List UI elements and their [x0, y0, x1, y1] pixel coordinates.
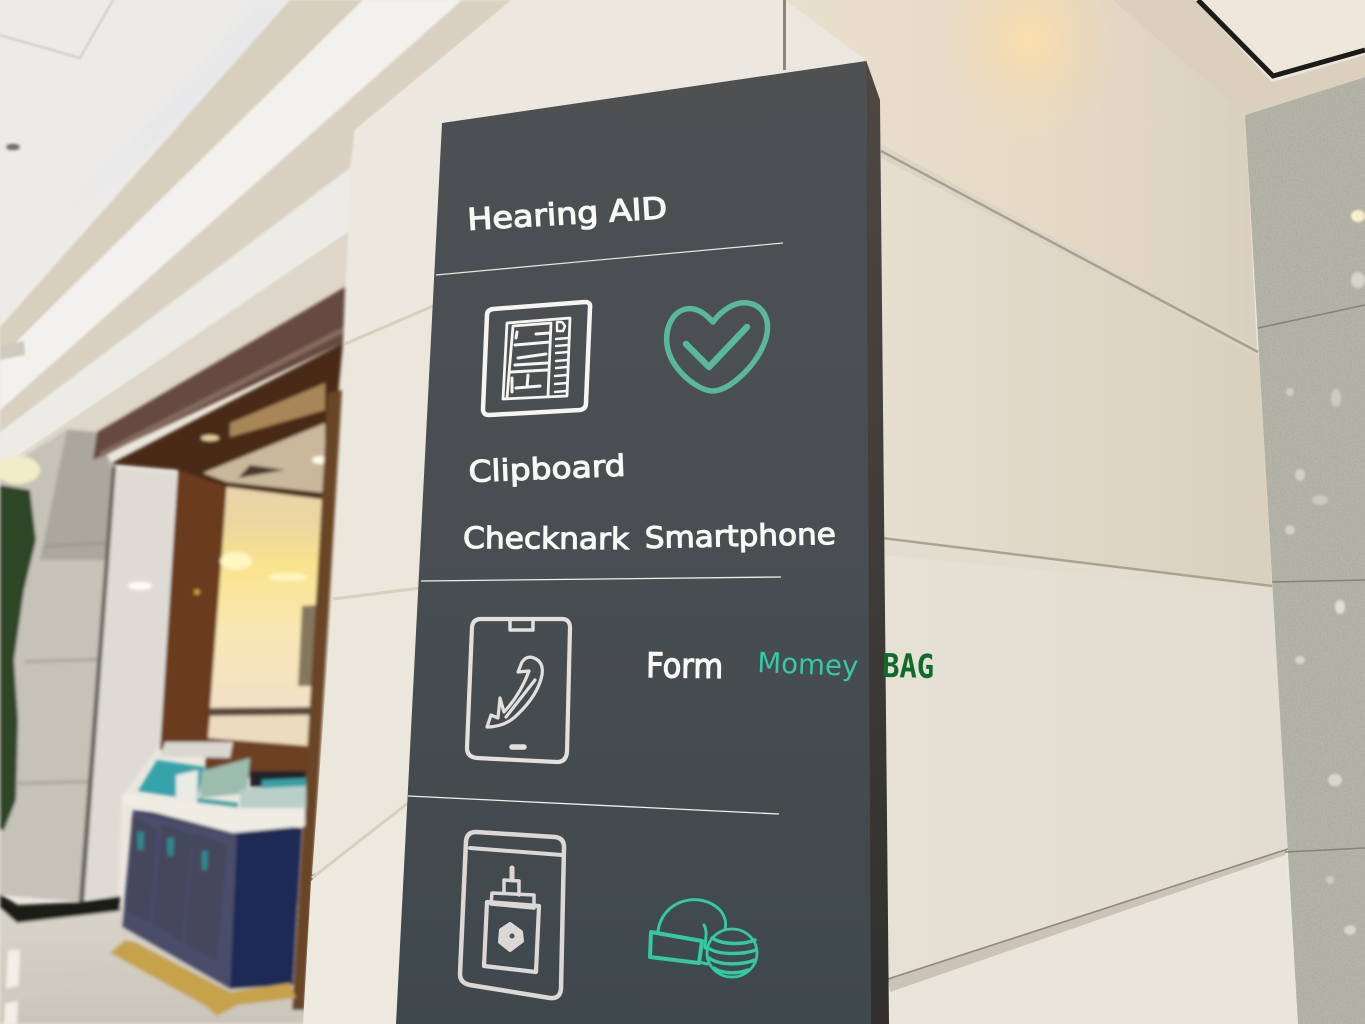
- column behind sign: stacked stone blocks: [303, 0, 785, 1024]
- right door jamb: [292, 390, 342, 1010]
- label: Form: Form: [646, 646, 723, 687]
- counter goods: [138, 760, 205, 800]
- black base: [0, 894, 120, 923]
- floor: [0, 905, 310, 1024]
- icon: money bag with coins: [650, 900, 757, 977]
- interior window: [210, 487, 324, 709]
- icon: clipboard: [483, 302, 590, 415]
- sign face: [396, 61, 871, 1024]
- label: Clipboard: Clipboard: [468, 449, 626, 489]
- sign panel: [396, 61, 871, 1024]
- sign side edge: [866, 60, 889, 1024]
- plant: [0, 485, 36, 830]
- cabinet: [122, 810, 302, 989]
- right wall: stone blocks: [783, 0, 1298, 1024]
- icon: tablet with bottle: [460, 832, 564, 998]
- wood soffit header: [93, 287, 345, 460]
- right marble wall: [1245, 77, 1365, 1024]
- label: Smartphone: Smartphone: [644, 517, 836, 555]
- heading: Hearing AID: Hearing AID: [466, 191, 668, 238]
- marble pillar: [0, 429, 115, 902]
- icon: heart with checkmark: [667, 303, 767, 391]
- left background: pillar, door and counter: [0, 287, 345, 1024]
- counter top: [122, 793, 305, 833]
- white panel: [82, 468, 177, 900]
- label: Checknark: Checknark: [463, 521, 629, 556]
- ceiling recess top right: [1112, 0, 1365, 115]
- gold base: [110, 940, 296, 1016]
- label: BAG on wall: BAG: [882, 646, 935, 686]
- label: Momey: Momey: [757, 646, 859, 683]
- wood door frame: [160, 470, 227, 750]
- divider lines: [436, 243, 783, 275]
- icon: smartphone with handset: [467, 619, 570, 762]
- ceiling: stepped white and beige bands: [0, 0, 512, 468]
